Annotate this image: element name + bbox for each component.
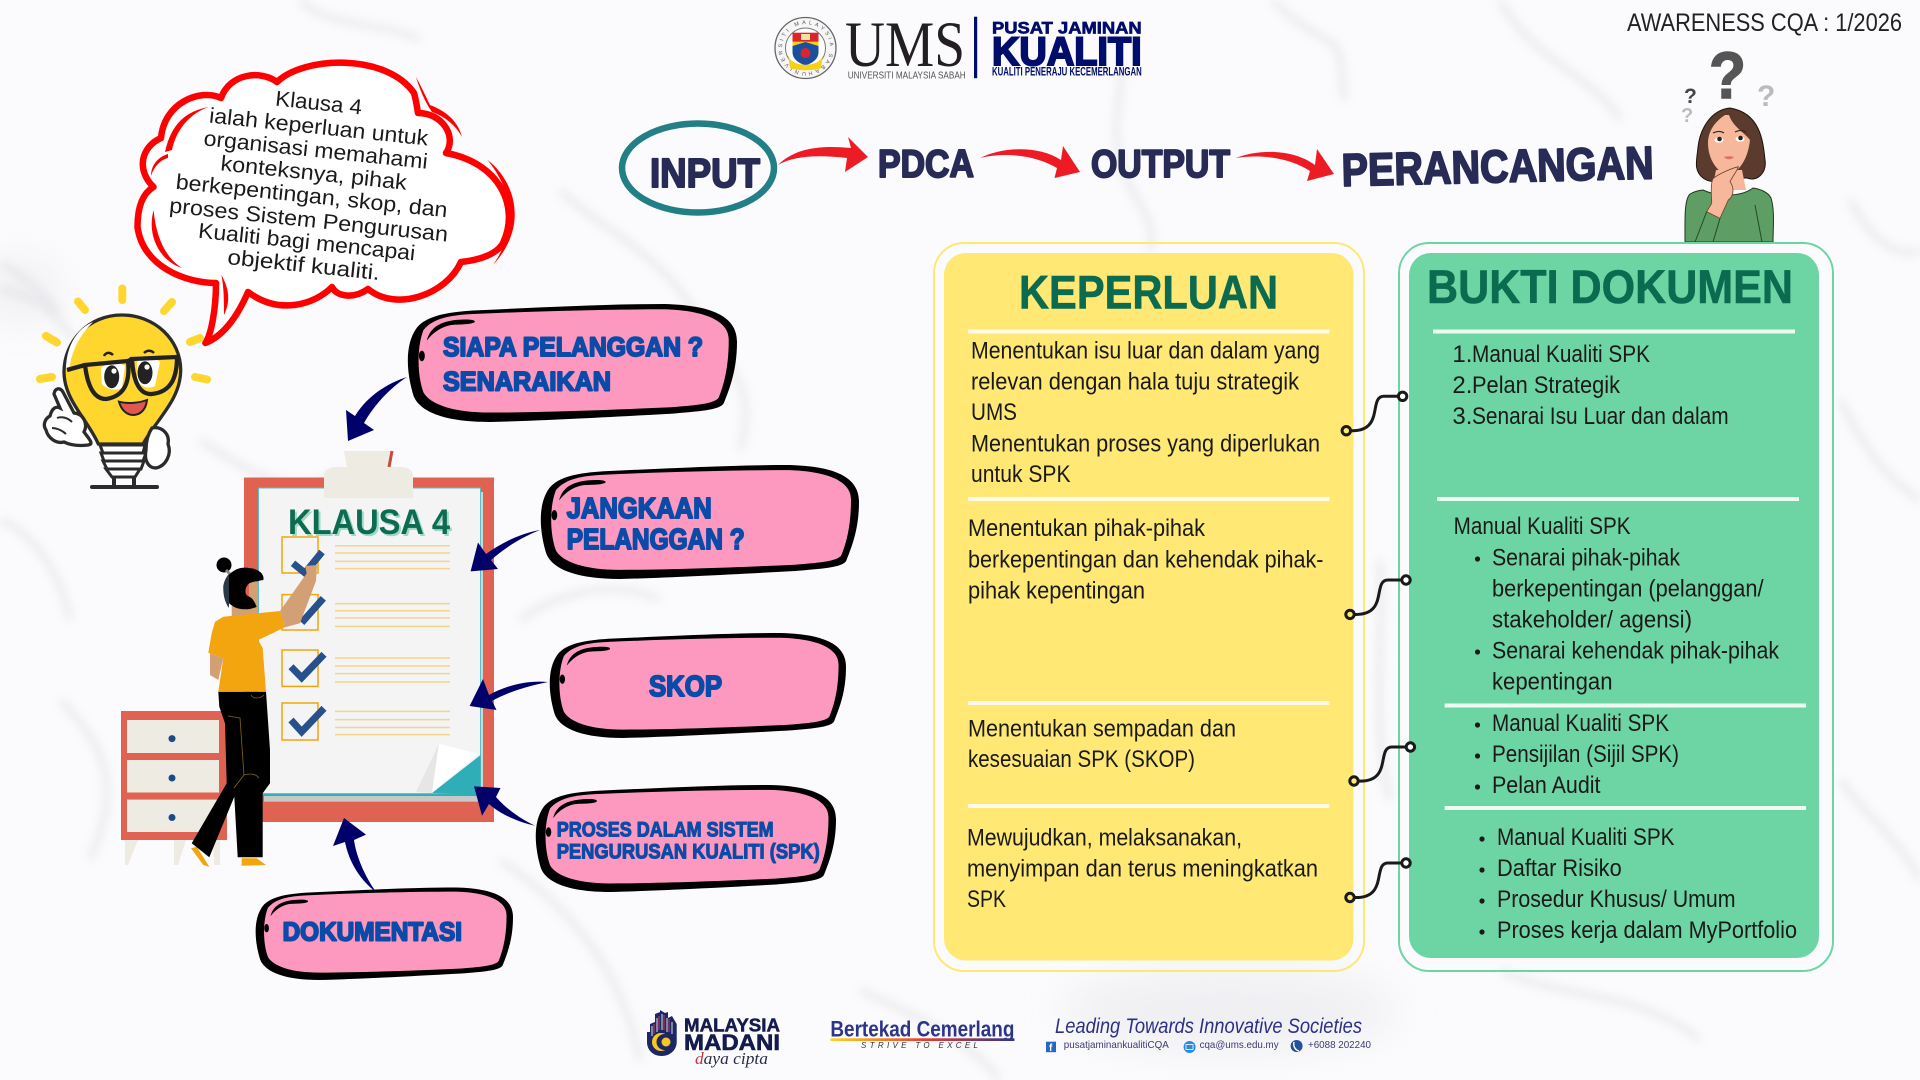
heading: bukti dokumen: BUKTI DOKUMEN: [1427, 260, 1793, 313]
callout: jangkaan pelanggan: [541, 465, 859, 579]
text: requirement 2: Menentukan pihak-pihak: [968, 515, 1206, 542]
logo: UMS Pusat Jaminan Kualiti: [774, 9, 1142, 81]
panel: bukti dokumen: [1399, 243, 1833, 971]
text: evidence 2: Senarai pihak-pihak: [1492, 544, 1681, 571]
panel: keperluan: [934, 243, 1364, 971]
text: evidence 1: [1452, 341, 1729, 430]
text: evidence 2: Senarai kehendak pihak-pihak: [1492, 638, 1780, 664]
question marks: ?: [1709, 38, 1746, 112]
strive tagline: STRIVE TO EXCEL: [861, 1041, 978, 1050]
callout: siapa pelanggan: [408, 304, 737, 422]
logo: Malaysia Madani: MADANI: [684, 1030, 780, 1055]
arrow: output to perancangan: [1236, 149, 1334, 181]
text: requirement 4: menyimpan dan terus meningkatkan: [967, 856, 1318, 883]
cloud text: konteksnya, pihak: [219, 151, 408, 195]
person ticking checklist: [191, 558, 317, 867]
text: evidence 2: berkepentingan (pelanggan/: [1492, 576, 1764, 602]
icon: UMS seal: UNIVERSITI MALAYSIA SABAH: [778, 20, 834, 76]
text: evidence 2: stakeholder/ agensi): [1492, 606, 1692, 634]
text: evidence 3: Pensijilan (Sijil SPK): [1492, 741, 1679, 768]
arrow: input to pdca: [778, 137, 868, 172]
madani wordmark: MALAYSIA: [684, 1015, 780, 1036]
icon: mail: [1184, 1041, 1196, 1053]
text: evidence 1: Manual Kualiti SPK: [1472, 341, 1650, 368]
question marks: ?: [1681, 105, 1693, 127]
text: requirement 1: UMS: [971, 399, 1017, 426]
text: requirement 4: Mewujudkan, melaksanakan,: [967, 825, 1242, 852]
question marks: ?: [1757, 80, 1775, 113]
cloud highlights: [151, 77, 515, 315]
text: evidence 1: Pelan Strategik: [1472, 372, 1621, 399]
cloud text: organisasi memahami: [203, 126, 429, 174]
text: requirement 1: Menentukan isu luar dan dalam yang: [971, 338, 1320, 364]
clipboard illustration: [244, 451, 494, 822]
text: requirement 1: relevan dengan hala tuju strategik: [971, 368, 1300, 396]
text: evidence 4: Prosedur Khusus/ Umum: [1497, 886, 1736, 913]
text: requirement 2: [968, 515, 1324, 604]
clipboard heading: KLAUSA 4: [290, 505, 452, 544]
label line 1: SIAPA PELANGGAN ?: [443, 332, 703, 362]
connectors between panels: [1342, 392, 1415, 902]
text: evidence 2: [1454, 513, 1780, 696]
text: requirement 4: [967, 825, 1318, 913]
bubble shape: [256, 888, 513, 980]
perancangan label: PERANCANGAN: [1341, 136, 1654, 196]
slogan: Leading Towards Innovative Societies: [1055, 1015, 1362, 1038]
text: evidence 2: Manual Kualiti SPK: [1454, 513, 1631, 540]
callout: proses: [536, 785, 836, 892]
cloud text: [168, 87, 449, 285]
checklist: [282, 537, 450, 740]
Kualiti heading: KUALITI: [992, 30, 1142, 74]
email: cqa@ums.edu.my: [1200, 1039, 1279, 1051]
icon: facebook: [1046, 1042, 1056, 1054]
arrow: jangkaan pelanggan: [471, 530, 540, 571]
callout: dokumentasi: [256, 888, 513, 980]
text: evidence 4: Manual Kualiti SPK: [1497, 824, 1674, 851]
cloud outline: [138, 63, 509, 343]
UMS wordmark: UMS: [845, 9, 965, 81]
icon: lightbulb character: [40, 288, 207, 487]
input label: INPUT: [650, 150, 760, 196]
arrow: skop: [470, 679, 548, 710]
question marks: ?: [1684, 85, 1697, 108]
question marks: [1681, 38, 1775, 127]
text: requirement 3: [968, 716, 1236, 773]
arrow: proses: [474, 786, 535, 826]
logo: Bertekad Cemerlang: Bertekad Cemerlang: [830, 1017, 1014, 1042]
text: requirement 4: SPK: [967, 886, 1006, 913]
label: SKOP: [649, 671, 722, 703]
label line 1: PROSES DALAM SISTEM: [557, 818, 774, 842]
cloud text: berkepentingan, skop, dan: [175, 170, 449, 222]
pdca label: PDCA: [878, 143, 974, 186]
tagline: daya cipta: [695, 1049, 768, 1068]
text: evidence 1: 2.: [1452, 372, 1472, 399]
cloud text: Kualiti bagi mencapai: [197, 219, 416, 265]
icon: facebook: f: [1049, 1043, 1053, 1054]
label line 2: PENGURUSAN KUALITI (SPK): [557, 840, 820, 864]
university name: UNIVERSITI MALAYSIA SABAH: [848, 70, 966, 81]
Pusat Jaminan heading: PUSAT JAMINAN: [992, 18, 1142, 37]
text: evidence 3: [1475, 710, 1679, 799]
cloud text: Klausa 4: [274, 87, 363, 120]
logo: Bertekad Cemerlang: [830, 1017, 1014, 1050]
arrow: dokumentasi: [333, 818, 376, 892]
facebook handle: pusatjaminankualitiCQA: [1064, 1039, 1169, 1051]
arrow: siapa pelanggan: [346, 377, 407, 441]
clipboard heading: KLAUSA 4: [288, 503, 450, 542]
input oval: [622, 124, 774, 212]
text: evidence 4: Daftar Risiko: [1497, 855, 1622, 882]
text: requirement 1: [971, 338, 1320, 488]
Kualiti tagline: KUALITI PENERAJU KECEMERLANGAN: [992, 65, 1142, 79]
text: evidence 1: 3.: [1452, 403, 1472, 430]
text: evidence 2: kepentingan: [1492, 668, 1612, 696]
label line 2: SENARAIKAN: [443, 366, 611, 396]
clip: [324, 451, 413, 498]
cloud text: ialah keperluan untuk: [208, 104, 430, 150]
output label: OUTPUT: [1091, 143, 1230, 186]
phone number: +6088 202240: [1308, 1039, 1371, 1051]
flow: input to perancangan: [622, 124, 1654, 212]
heading: keperluan: KEPERLUAN: [1019, 266, 1278, 318]
text: evidence 1: 1.: [1452, 341, 1472, 368]
text: requirement 2: berkepentingan dan kehendak pihak-: [968, 546, 1324, 574]
label line 1: JANGKAAN: [567, 493, 712, 525]
bubble shape: [550, 633, 846, 738]
drawer cabinet: [121, 711, 227, 865]
callout: skop: [550, 633, 846, 738]
footer: tagline and contacts: [1046, 1015, 1371, 1054]
bubble shape: [541, 465, 859, 579]
label: DOKUMENTASI: [283, 917, 462, 947]
logo: Malaysia Madani: [647, 1010, 780, 1068]
icon: phone: [1291, 1040, 1303, 1052]
page curl: [416, 744, 481, 795]
text: evidence 4: Proses kerja dalam MyPortfolio: [1497, 917, 1797, 944]
text: requirement 1: Menentukan proses yang diperlukan: [971, 430, 1320, 458]
text: evidence 1: Senarai Isu Luar dan dalam: [1472, 403, 1729, 430]
text: requirement 3: kesesuaian SPK (SKOP): [968, 746, 1195, 773]
icon: thinking woman: [1681, 38, 1775, 242]
text: evidence 4: [1479, 824, 1797, 944]
speech cloud: [138, 63, 515, 343]
text: requirement 2: pihak kepentingan: [968, 578, 1145, 604]
bubble shape: [536, 785, 836, 892]
bubble shape: [408, 304, 737, 422]
text: requirement 3: Menentukan sempadan dan: [968, 716, 1236, 742]
text: evidence 3: Pelan Audit: [1492, 772, 1601, 799]
cloud text: proses Sistem Pengurusan: [168, 193, 449, 247]
cloud text: objektif kualiti.: [226, 245, 381, 285]
arrow: pdca to output: [980, 146, 1080, 178]
icon: madani emblem: [647, 1010, 677, 1056]
text: evidence 3: Manual Kualiti SPK: [1492, 710, 1669, 737]
text: requirement 1: untuk SPK: [971, 461, 1070, 488]
label line 2: PELANGGAN ?: [567, 524, 745, 556]
